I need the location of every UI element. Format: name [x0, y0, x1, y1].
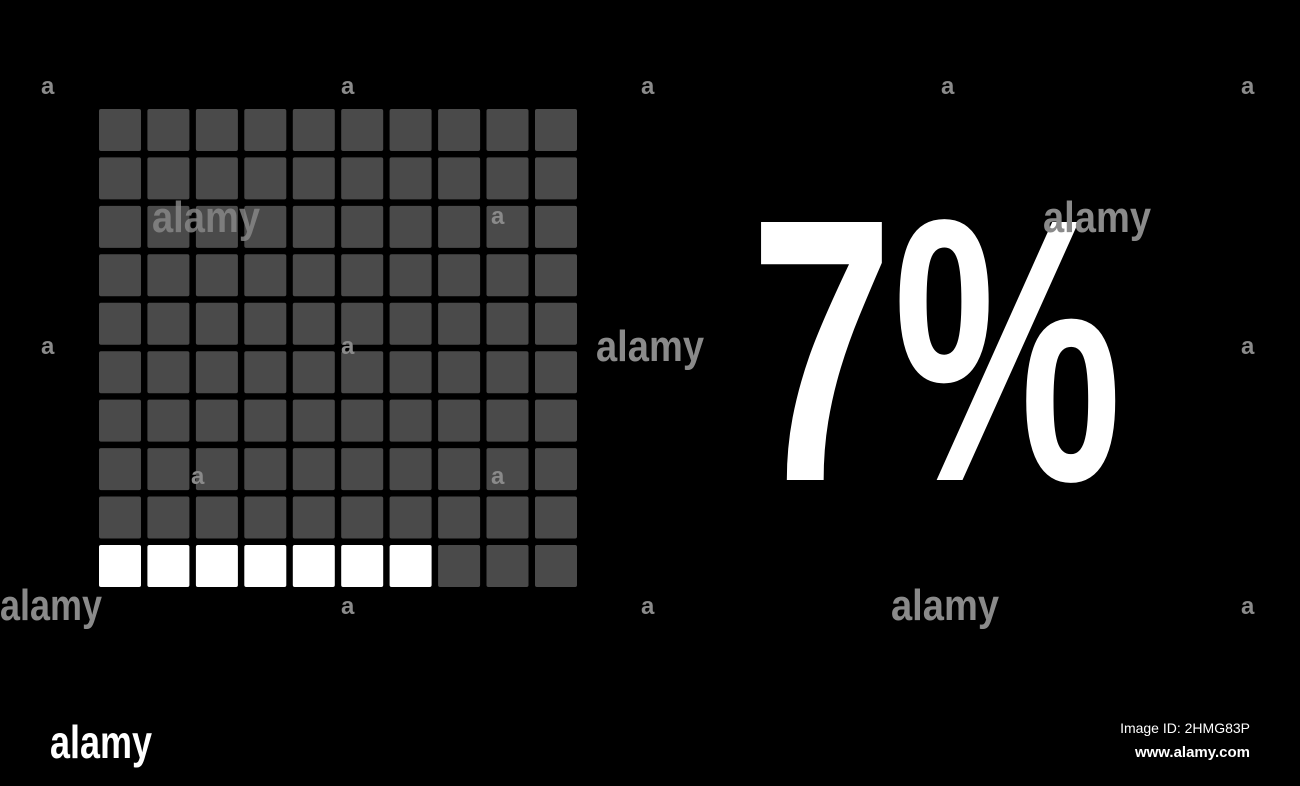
watermarks: a — [1241, 333, 1255, 360]
watermarks: a — [341, 73, 355, 100]
watermarks: a — [941, 73, 955, 100]
watermarks: a — [641, 73, 655, 100]
watermarks: a — [41, 73, 55, 100]
watermarks: a — [341, 593, 355, 620]
percentage label: 7% — [750, 142, 1122, 560]
watermarks: a — [341, 333, 355, 360]
watermarks: a — [1241, 73, 1255, 100]
watermarks: alamy — [152, 193, 260, 242]
waffle chart: 7 of 100 — [99, 109, 577, 587]
watermarks: a — [491, 203, 505, 230]
watermarks: alamy — [0, 581, 102, 630]
watermarks: alamy — [596, 322, 704, 371]
watermarks: alamy — [891, 581, 999, 630]
watermarks — [0, 73, 1255, 630]
watermarks: a — [41, 333, 55, 360]
image id: Image ID: 2HMG83P — [1120, 720, 1250, 736]
footer logo: alamy — [50, 716, 152, 768]
watermarks: a — [491, 463, 505, 490]
watermarks: a — [641, 593, 655, 620]
website: www.alamy.com — [1134, 744, 1250, 761]
watermarks: a — [191, 463, 205, 490]
watermarks: a — [1241, 593, 1255, 620]
watermarks: alamy — [1043, 193, 1151, 242]
